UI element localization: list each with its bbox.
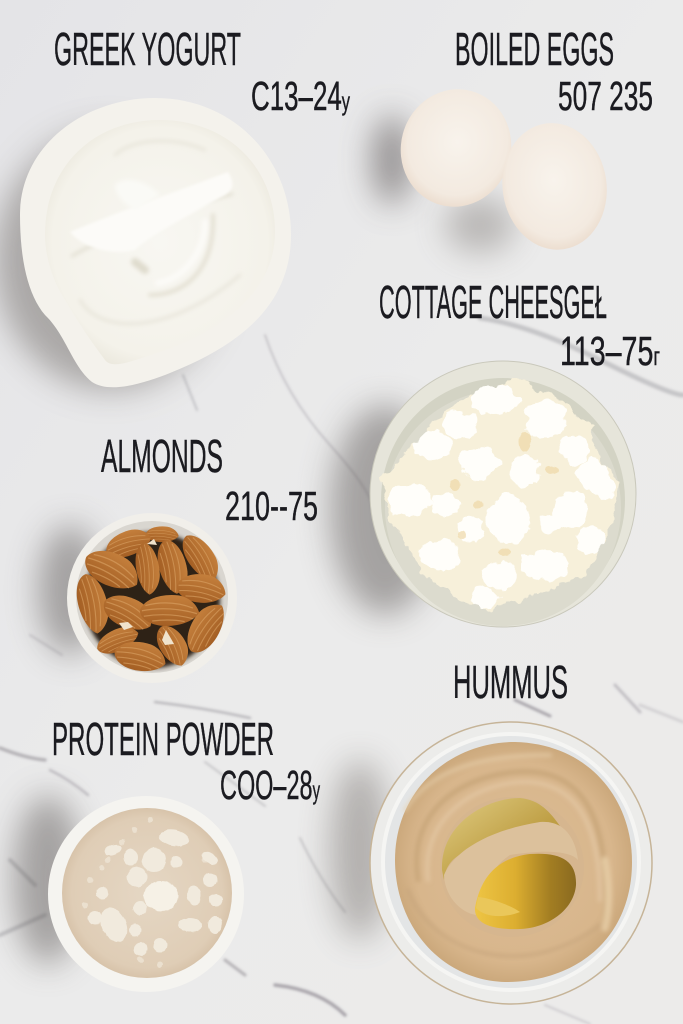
- title: greek yogurt label: [54, 23, 350, 119]
- icon: boiled eggs: [372, 77, 615, 257]
- title: almonds label: [101, 430, 318, 529]
- title: cottage cheese label: [379, 276, 660, 374]
- title: almonds label: ALMONDS: [101, 430, 223, 482]
- title: protein powder label: [52, 713, 320, 808]
- title: greek yogurt label: GREEK YOGURT: [54, 23, 241, 75]
- bowl: almonds: [38, 513, 237, 683]
- title: greek yogurt label: C13–24y: [251, 73, 350, 119]
- bowl: protein powder: [13, 795, 244, 992]
- bowl: cottage cheese: [330, 361, 636, 627]
- title: boiled eggs label: [455, 23, 653, 119]
- bowl: hummus: [330, 722, 652, 1004]
- title: protein powder label: PROTEIN POWDER: [52, 713, 274, 765]
- title: hummus label: HUMMUS: [453, 656, 568, 708]
- title: almonds label: 210--75: [225, 483, 318, 529]
- bowl: greek yogurt: [0, 98, 291, 390]
- title: protein powder label: COO–28y: [220, 762, 320, 808]
